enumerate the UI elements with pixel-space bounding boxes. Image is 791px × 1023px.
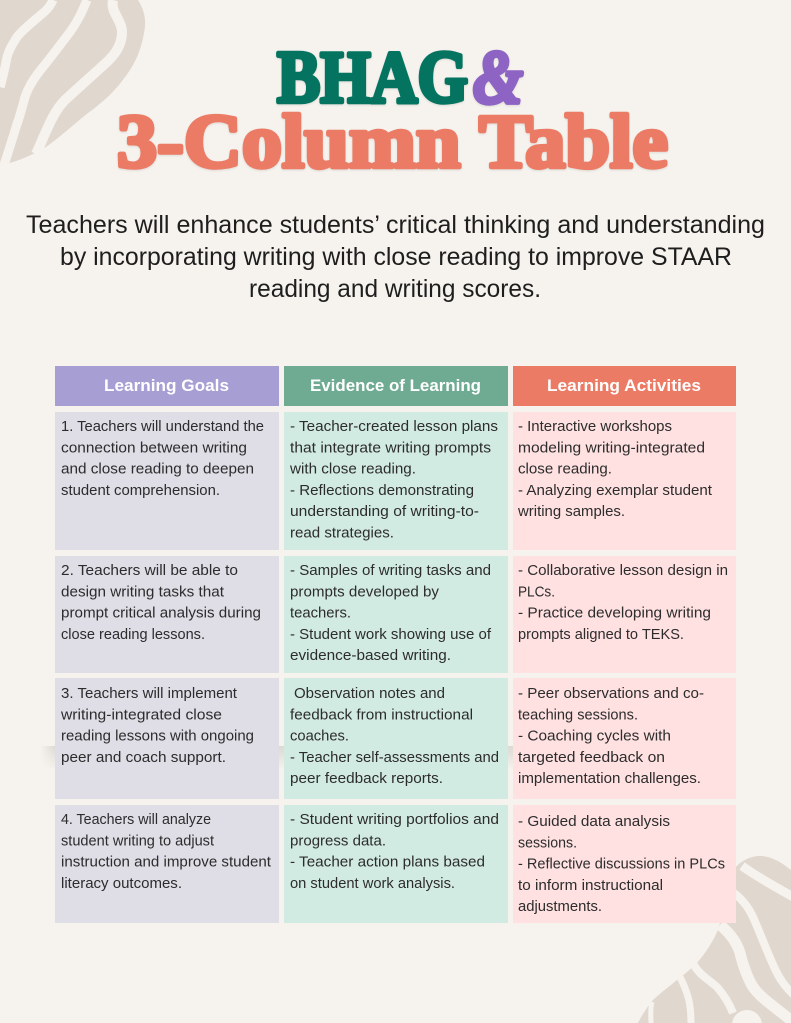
faint shadow band behind table bbox=[40, 746, 736, 770]
header: Learning Activities: Learning Activities bbox=[547, 377, 701, 395]
row 4: activities: to inform instructional bbox=[518, 877, 663, 894]
row 2: learning goal bbox=[55, 556, 279, 673]
row 4: activities: - Guided data analysis bbox=[518, 813, 670, 830]
row 3: activities: - Peer observations and co- bbox=[518, 685, 704, 702]
title: 3-Column Table: 3-Column Table bbox=[117, 100, 668, 184]
title: ampersand: & bbox=[473, 36, 523, 120]
row 2: evidence: prompts developed by bbox=[290, 583, 440, 600]
row 1: activities: - Interactive workshops bbox=[518, 418, 672, 435]
row 2: learning goal: 2. Teachers will be able to bbox=[61, 562, 238, 579]
row 1: activities: - Analyzing exemplar student bbox=[518, 482, 713, 499]
row 1: learning goal: 1. Teachers will understand the bbox=[61, 418, 264, 435]
row 4: learning goal: instruction and improve student bbox=[61, 854, 272, 871]
row 4: evidence: - Teacher action plans based bbox=[290, 854, 485, 871]
row 1: evidence: - Teacher-created lesson plans bbox=[290, 418, 498, 435]
row 1: learning goal: student comprehension. bbox=[61, 482, 220, 499]
row 3: evidence: feedback from instructional bbox=[290, 706, 473, 723]
row 3: activities bbox=[513, 678, 736, 799]
row 2: activities: prompts aligned to TEKS. bbox=[518, 626, 684, 643]
row 1: evidence: read strategies. bbox=[290, 524, 394, 542]
intro statement: reading and writing scores. bbox=[249, 275, 541, 303]
row 4: evidence bbox=[284, 805, 508, 923]
row 1: evidence: that integrate writing prompts bbox=[290, 439, 491, 456]
row 4: activities: sessions. bbox=[518, 834, 577, 852]
row 2: evidence: evidence-based writing. bbox=[290, 647, 451, 664]
decorative blob: bottom right bbox=[638, 856, 791, 1023]
row 4: learning goal: student writing to adjust bbox=[61, 832, 215, 850]
row 2: learning goal: close reading lessons. bbox=[61, 626, 205, 643]
title: BHAG: BHAG bbox=[277, 37, 468, 119]
row 1: learning goal bbox=[55, 412, 279, 550]
row 1: activities: close reading. bbox=[518, 461, 612, 478]
row 3: activities: targeted feedback on bbox=[518, 749, 665, 766]
header: Evidence of Learning: Evidence of Learning bbox=[310, 377, 481, 395]
row 1: evidence: with close reading. bbox=[289, 461, 416, 478]
row 2: learning goal: prompt critical analysis during bbox=[61, 605, 261, 622]
row 3: learning goal: 3. Teachers will implement bbox=[61, 685, 238, 702]
row 4: evidence: progress data. bbox=[290, 832, 386, 850]
row 4: activities bbox=[513, 805, 736, 923]
row 2: activities: - Collaborative lesson design in bbox=[518, 562, 728, 579]
intro statement: Teachers will enhance students’ critical thinking and understanding bbox=[26, 211, 765, 239]
row 3: learning goal: writing-integrated close bbox=[60, 706, 222, 723]
row 3: evidence: Observation notes and bbox=[294, 685, 445, 702]
row 3: activities: implementation challenges. bbox=[518, 770, 701, 787]
header: Evidence of Learning bbox=[284, 366, 508, 406]
row 3: learning goal bbox=[55, 678, 279, 799]
header: Learning Goals: Learning Goals bbox=[104, 377, 229, 395]
row 2: evidence: teachers. bbox=[290, 605, 351, 622]
decorative blob: top left bbox=[0, 0, 145, 165]
row 3: activities: - Coaching cycles with bbox=[518, 728, 671, 745]
row 4: activities: - Reflective discussions in PLCs bbox=[518, 856, 725, 873]
row 1: evidence: understanding of writing-to- bbox=[290, 503, 479, 520]
row 1: activities bbox=[513, 412, 736, 550]
title bbox=[117, 36, 668, 184]
row 2: evidence: - Samples of writing tasks and bbox=[290, 562, 491, 579]
row 2: activities bbox=[513, 556, 736, 673]
row 2: activities: PLCs. bbox=[518, 583, 555, 600]
row 1: learning goal: connection between writing bbox=[61, 439, 247, 456]
row 3: evidence: peer feedback reports. bbox=[290, 770, 443, 787]
row 3: learning goal: peer and coach support. bbox=[61, 749, 226, 766]
row 4: learning goal bbox=[55, 805, 279, 923]
row 3: evidence bbox=[284, 678, 508, 799]
row 1: evidence bbox=[284, 412, 508, 550]
row 4: learning goal: 4. Teachers will analyze bbox=[61, 811, 211, 828]
intro statement: by incorporating writing with close reading to improve STAAR bbox=[60, 243, 732, 271]
row 4: evidence: - Student writing portfolios and bbox=[290, 811, 499, 828]
row 2: learning goal: design writing tasks that bbox=[61, 583, 225, 600]
row 3: evidence: coaches. bbox=[290, 728, 349, 745]
row 2: evidence: - Student work showing use of bbox=[290, 626, 492, 643]
row 3: activities: teaching sessions. bbox=[518, 706, 638, 723]
intro statement bbox=[26, 211, 765, 303]
header: Learning Activities bbox=[513, 366, 736, 406]
row 4: activities: adjustments. bbox=[518, 898, 602, 915]
row 1: activities: writing samples. bbox=[517, 503, 625, 520]
row 4: learning goal: literacy outcomes. bbox=[61, 875, 182, 892]
header: Learning Goals bbox=[55, 366, 279, 406]
table bbox=[55, 366, 736, 923]
row 2: evidence bbox=[284, 556, 508, 673]
row 3: learning goal: reading lessons with ongoing bbox=[61, 728, 254, 745]
row 4: evidence: on student work analysis. bbox=[290, 875, 455, 892]
row 2: activities: - Practice developing writing bbox=[518, 605, 711, 622]
row 1: evidence: - Reflections demonstrating bbox=[290, 482, 474, 499]
row 3: evidence: - Teacher self-assessments and bbox=[290, 749, 499, 766]
row 1: activities: modeling writing-integrated bbox=[518, 439, 705, 456]
row 1: learning goal: and close reading to deepen bbox=[61, 461, 254, 478]
